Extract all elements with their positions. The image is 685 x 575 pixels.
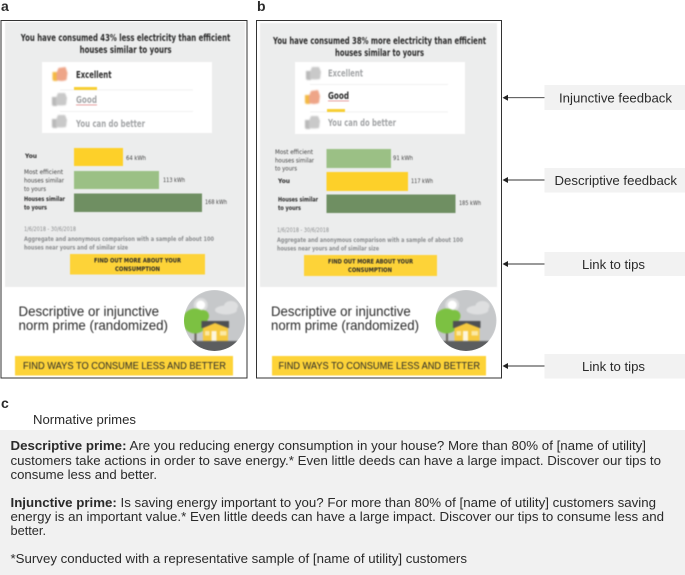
panel b: bar chart: 185 kWh bbox=[459, 201, 481, 207]
text block: injunctive prime bbox=[10, 496, 664, 538]
panel a: bar chart: 113 kWh bbox=[163, 178, 185, 184]
panel b: bar chart: houses similar bbox=[275, 158, 314, 164]
panel b: bar chart: 117 kWh bbox=[411, 179, 433, 185]
callout: descriptive feedback: Descriptive feedback bbox=[554, 173, 678, 188]
panel a: bar chart: houses similar bbox=[24, 178, 64, 184]
panel a: prime text bbox=[18, 303, 168, 333]
panel a: bar chart: 64 kWh bbox=[126, 156, 146, 162]
panel b: bar chart: Houses similar bbox=[278, 196, 319, 204]
text block: injunctive prime: better. bbox=[10, 524, 46, 538]
panel b: tips button bbox=[272, 356, 486, 376]
panel b: prime text: norm prime (randomized) bbox=[271, 317, 419, 333]
panel b: rating card: Excellent bbox=[328, 68, 363, 80]
panel b: prime text bbox=[271, 303, 419, 333]
panel b: headline bbox=[272, 36, 486, 59]
panel a: bar chart: to yours bbox=[24, 204, 47, 212]
panel b: date and note: houses near yours and of similar size bbox=[277, 246, 379, 252]
panel a: bar chart: Houses similar bbox=[24, 196, 66, 203]
panel b: date and note: 1/6/2018 - 30/6/2018 bbox=[277, 227, 329, 234]
panel b: bar chart: Most efficient bbox=[275, 149, 313, 156]
text block: injunctive prime: energy is an important value.* Even little deeds can have a large impact. Discover our tips to consume less and bbox=[10, 510, 664, 524]
callout: injunctive feedback bbox=[502, 85, 685, 110]
panel b: date and note: Aggregate and anonymous comparison with a sample of about 100 bbox=[277, 237, 463, 244]
label: panel c: c bbox=[1, 395, 9, 411]
panel b: tips button: FIND WAYS TO CONSUME LESS AND BETTER bbox=[278, 360, 480, 372]
panel a: bar chart: Most efficient bbox=[24, 169, 63, 176]
panel: c bbox=[0, 430, 685, 575]
panel a: headline: You have consumed 43% less electricity than efficient bbox=[20, 33, 231, 44]
panel a: rating card: You can do better bbox=[75, 119, 145, 130]
icon: thumb grey bbox=[305, 116, 320, 129]
panel b: bar chart: You bbox=[277, 177, 290, 185]
text block: injunctive prime: Injunctive prime: Is saving energy important to you? For more than 80% of [name of utility] customers saving bbox=[10, 496, 656, 510]
callout: link to tips: Link to tips bbox=[582, 257, 645, 272]
icon: thumb grey bbox=[52, 93, 67, 106]
panel a: tips button bbox=[15, 356, 233, 376]
icon: thumb grey bbox=[306, 67, 321, 80]
callout: link to tips: Link to tips bbox=[582, 359, 645, 374]
panel a: bar chart: You bbox=[24, 152, 37, 160]
icon: house illustration bbox=[436, 290, 496, 351]
panel a: date and note bbox=[24, 226, 214, 252]
callout: injunctive feedback: Injunctive feedback bbox=[559, 91, 673, 106]
panel b: rating card bbox=[295, 62, 465, 134]
callout: descriptive feedback bbox=[502, 168, 685, 192]
panel b: bar chart: 91 kWh bbox=[393, 156, 413, 162]
panel b: rating card: Good bbox=[328, 91, 349, 102]
panel a: rating card: Good bbox=[76, 95, 97, 106]
panel a: consumption button: CONSUMPTION bbox=[115, 266, 160, 273]
icon: thumb orange bbox=[52, 67, 68, 81]
panel b: rating card: You can do better bbox=[327, 118, 396, 129]
panel a: tips button: FIND WAYS TO CONSUME LESS AND BETTER bbox=[23, 360, 226, 372]
footnote: *Survey conducted with a representative sample of [name of utility] customers bbox=[10, 552, 467, 566]
panel b: bar chart: to yours bbox=[275, 166, 297, 172]
panel b: feedback screenshot bbox=[260, 23, 497, 287]
panel a: bar chart bbox=[24, 148, 227, 212]
panel b: headline: houses similar to yours bbox=[335, 48, 424, 59]
panel b: bar chart bbox=[275, 149, 481, 213]
panel: a bbox=[1, 20, 250, 378]
panel b: consumption button: CONSUMPTION bbox=[348, 267, 392, 274]
panel b: date and note bbox=[277, 227, 463, 252]
panel a: date and note: Aggregate and anonymous comparison with a sample of about 100 bbox=[24, 236, 214, 243]
panel a: date and note: houses near yours and of similar size bbox=[24, 244, 128, 252]
panel a: headline bbox=[20, 33, 231, 56]
panel a: bar chart: 168 kWh bbox=[205, 200, 227, 206]
panel a: prime text: norm prime (randomized) bbox=[18, 317, 168, 333]
text block: descriptive prime: customers take actions in order to save energy.* Even little deeds can have a large impact. Discover our tips to bbox=[10, 454, 661, 468]
panel a: prime text: Descriptive or injunctive bbox=[18, 303, 159, 319]
text block: descriptive prime: Descriptive prime: Are you reducing energy consumption in your house? More than 80% of [name of utility] bbox=[10, 439, 646, 453]
text block: descriptive prime: consume less and better. bbox=[10, 468, 157, 482]
panel b: consumption button bbox=[304, 255, 437, 276]
callout: link to tips bbox=[502, 252, 685, 276]
panel b: prime text: Descriptive or injunctive bbox=[271, 303, 411, 319]
panel a: bar chart: to yours bbox=[24, 186, 46, 193]
panel: b bbox=[256, 20, 502, 378]
panel a: headline: houses similar to yours bbox=[80, 45, 172, 56]
panel a: rating card bbox=[42, 62, 212, 133]
panel a: feedback screenshot bbox=[5, 22, 245, 287]
panel a: consumption button bbox=[70, 254, 205, 274]
icon: thumb orange bbox=[305, 90, 320, 104]
panel a: consumption button: FIND OUT MORE ABOUT YOUR bbox=[94, 258, 181, 264]
icon: house illustration bbox=[184, 290, 245, 351]
heading: normative primes: Normative primes bbox=[33, 413, 136, 427]
panel b: consumption button: FIND OUT MORE ABOUT YOUR bbox=[328, 258, 413, 266]
panel a: date and note: 1/6/2018 - 30/6/2018 bbox=[24, 226, 76, 233]
panel b: headline: You have consumed 38% more electricity than efficient bbox=[272, 36, 486, 47]
callout: link to tips bbox=[502, 354, 685, 378]
panel b: bar chart: to yours bbox=[278, 205, 301, 212]
icon: thumb grey bbox=[52, 115, 67, 128]
panel a: rating card: Excellent bbox=[76, 70, 112, 81]
text block: descriptive prime bbox=[10, 439, 661, 482]
